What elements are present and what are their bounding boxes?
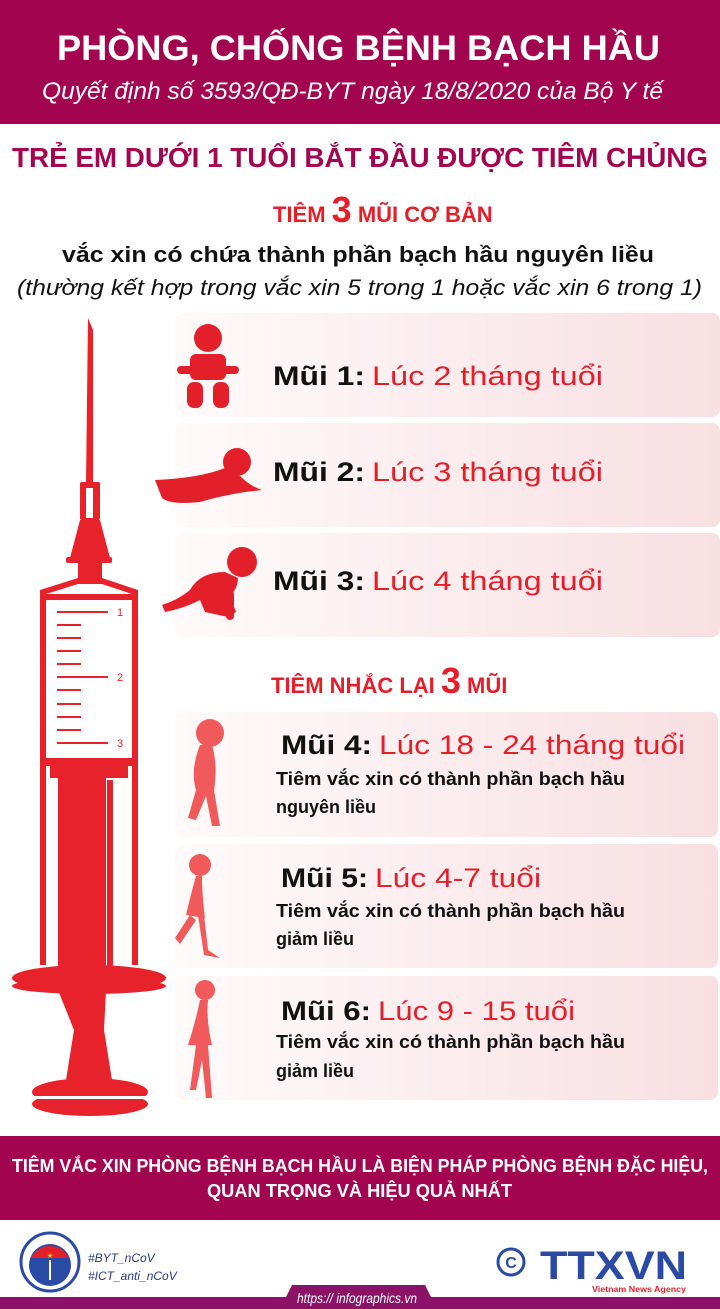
vaccine description (17, 242, 702, 300)
syringe illustration: 3 (117, 738, 123, 750)
sub heading: 3 boosters: TIÊM NHẮC LẠI 3 MŨI (271, 660, 507, 701)
icon: baby sitting (177, 324, 239, 408)
sub heading: 3 basic doses: TIÊM 3 MŨI CƠ BẢN (273, 189, 493, 230)
syringe illustration: 2 (117, 672, 123, 684)
card 2 (155, 423, 720, 527)
card 1: Mũi 1: (273, 361, 365, 391)
card 3: Mũi 3: (273, 566, 365, 596)
card 2: Lúc 3 tháng tuổi (372, 457, 603, 487)
card 4: Lúc 18 - 24 tháng tuổi (379, 730, 685, 760)
logo: TTXVN: TTXVN (540, 1244, 687, 1288)
logo: TTXVN (498, 1244, 687, 1294)
logo: TTXVN: Vietnam News Agency (592, 1285, 687, 1294)
card 4 (175, 712, 718, 837)
logo: TTXVN: C (505, 1255, 517, 1272)
card 3: Lúc 4 tháng tuổi (372, 566, 603, 596)
card 4: Mũi 4: (281, 730, 372, 760)
card 1: Lúc 2 tháng tuổi (372, 361, 603, 391)
header (0, 0, 720, 124)
section heading: TRẺ EM DƯỚI 1 TUỔI BẮT ĐẦU ĐƯỢC TIÊM CHỦNG (12, 141, 708, 173)
card 2: Mũi 2: (273, 457, 365, 487)
card 5: Tiêm vắc xin có thành phần bạch hầu (276, 900, 625, 921)
icon: girl walking (175, 854, 220, 958)
card 5 (175, 844, 718, 968)
logo: Ministry of Health (21, 1233, 79, 1291)
card 4: Tiêm vắc xin có thành phần bạch hầu (276, 768, 625, 789)
footer strip with url: https:// infographics.vn (297, 1290, 417, 1306)
card 6: Mũi 6: (281, 996, 371, 1026)
card 6: giảm liều (276, 1061, 354, 1081)
syringe illustration: 1 (117, 607, 123, 619)
card 3 (162, 533, 720, 637)
vaccine description: vắc xin có chứa thành phần bạch hầu nguyên liều (62, 242, 654, 267)
icon: baby lying (155, 448, 262, 503)
bottom banner: QUAN TRỌNG VÀ HIỆU QUẢ NHẤT (207, 1180, 512, 1201)
syringe illustration (12, 318, 166, 1116)
card 5: Mũi 5: (281, 863, 368, 893)
hashtags: #BYT_nCoV (88, 1251, 156, 1265)
bottom banner (0, 1136, 720, 1220)
card 5: Lúc 4-7 tuổi (375, 863, 541, 893)
icon: toddler (188, 719, 224, 826)
icon: girl (188, 980, 215, 1098)
icon: baby crawling (162, 547, 257, 620)
card 6: Tiêm vắc xin có thành phần bạch hầu (276, 1031, 625, 1052)
card 4: nguyên liều (276, 797, 376, 817)
hashtags: #ICT_anti_nCoV (88, 1269, 178, 1283)
card 6 (175, 976, 718, 1100)
hashtags (88, 1251, 178, 1283)
card 1 (175, 313, 720, 417)
card 5: giảm liều (276, 929, 354, 949)
card 6: Lúc 9 - 15 tuổi (378, 996, 575, 1026)
subtitle: Quyết định số 3593/QĐ-BYT ngày 18/8/2020 của Bộ Y tế (42, 78, 665, 105)
title: PHÒNG, CHỐNG BỆNH BẠCH HẦU (57, 28, 660, 68)
bottom banner: TIÊM VẮC XIN PHÒNG BỆNH BẠCH HẦU LÀ BIỆN PHÁP PHÒNG BỆNH ĐẶC HIỆU, (12, 1155, 708, 1176)
footer strip with url (0, 1285, 720, 1309)
logo: Ministry of Health: ★ (47, 1252, 53, 1260)
vaccine description: (thường kết hợp trong vắc xin 5 trong 1 hoặc vắc xin 6 trong 1) (17, 275, 702, 300)
